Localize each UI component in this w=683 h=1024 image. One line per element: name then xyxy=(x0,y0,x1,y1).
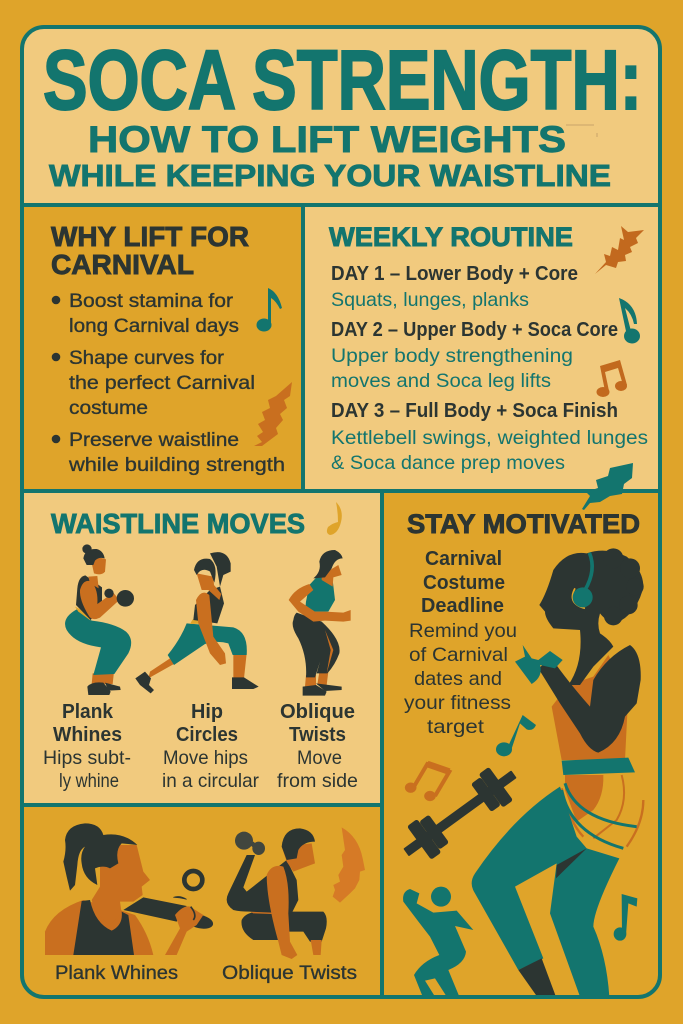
label: plank whines: Plank Whines xyxy=(55,962,178,984)
text: carnival costume deadline: Remind you xyxy=(409,620,517,642)
labels: hip circles: Hip xyxy=(191,701,223,723)
afro curls xyxy=(603,548,644,625)
heading: why lift: WHY LIFT FOR xyxy=(51,221,249,252)
illustration: dancing woman with headphones xyxy=(472,548,644,997)
icon: teal note xyxy=(496,715,536,756)
icon: teal note xyxy=(619,298,640,344)
figure: twist xyxy=(289,550,351,696)
labels: oblique twists: Twists xyxy=(289,724,346,746)
icon: teal feather overlapping border xyxy=(582,463,633,510)
text: carnival costume deadline: Carnival xyxy=(425,548,502,570)
day 2: DAY 2 – Upper Body + Soca Core xyxy=(331,319,618,341)
heading: weekly routine: WEEKLY ROUTINE xyxy=(329,222,573,252)
icon: orange leaf xyxy=(595,226,644,274)
text: carnival costume deadline: target xyxy=(427,716,485,738)
labels: hip circles: Circles xyxy=(176,724,238,746)
icon: orange feather xyxy=(333,827,365,903)
labels: plank whines: Hips subt- xyxy=(43,747,131,769)
panel: weekly routine xyxy=(303,205,659,491)
icon: orange double note xyxy=(405,764,449,801)
day 2 xyxy=(331,319,618,392)
labels: plank whines: Whines xyxy=(53,724,122,746)
panel: why lift for carnival xyxy=(22,205,303,491)
figure: lunge xyxy=(135,552,259,693)
labels: oblique twists xyxy=(277,701,358,792)
figure: squat with dumbbell xyxy=(65,544,134,695)
icon: orange double note xyxy=(596,360,627,397)
bullet list: while building strength xyxy=(68,454,285,476)
labels: hip circles: in a circular xyxy=(162,770,259,792)
bullet list: costume xyxy=(69,397,148,419)
labels: oblique twists: from side xyxy=(277,770,358,792)
day 3: Kettlebell swings, weighted lunges xyxy=(331,427,648,449)
day 1: Squats, lunges, planks xyxy=(331,289,529,311)
text: carnival costume deadline: Costume xyxy=(423,572,505,594)
icon: small teal squatting figure xyxy=(403,887,473,997)
labels: oblique twists: Oblique xyxy=(280,701,355,723)
panel: stay motivated xyxy=(382,491,659,997)
labels: plank whines: ly whine xyxy=(59,770,119,792)
subtitle line 2: WHILE KEEPING YOUR WAISTLINE xyxy=(49,158,611,193)
bullet list: Preserve waistline xyxy=(69,429,239,451)
panel: plank and oblique illustrations xyxy=(22,805,382,997)
labels: hip circles xyxy=(162,701,259,792)
icon: dumbbell xyxy=(394,757,526,869)
labels: oblique twists: Move xyxy=(297,747,342,769)
day 2: Upper body strengthening xyxy=(331,345,573,367)
text: carnival costume deadline: of Carnival xyxy=(409,644,508,666)
subtitle line 1: HOW TO LIFT WEIGHTS xyxy=(88,119,566,160)
icon: teal note lower right xyxy=(614,894,637,941)
bullet list: Shape curves for xyxy=(69,347,225,369)
day 3 xyxy=(331,400,648,474)
bullet list: the perfect Carnival xyxy=(69,372,255,394)
text: carnival costume deadline: dates and xyxy=(414,668,502,690)
illustration: plank whines woman xyxy=(45,823,214,955)
text: carnival costume deadline: Deadline xyxy=(421,595,504,617)
icon: teal music note xyxy=(256,288,282,332)
heading: carnival: CARNIVAL xyxy=(51,249,194,280)
labels: plank whines: Plank xyxy=(62,701,114,723)
icon: gold note xyxy=(327,502,342,535)
text: carnival costume deadline xyxy=(404,548,517,738)
day 3: DAY 3 – Full Body + Soca Finish xyxy=(331,400,618,422)
paper stain xyxy=(566,125,597,137)
bullet list xyxy=(52,290,285,476)
day 1: DAY 1 – Lower Body + Core xyxy=(331,263,578,285)
illustration: oblique twists woman xyxy=(227,828,327,959)
label: oblique twists: Oblique Twists xyxy=(222,962,357,984)
bullet list: Boost stamina for xyxy=(69,290,234,312)
bullet list: long Carnival days xyxy=(69,315,239,337)
text: carnival costume deadline: your fitness xyxy=(404,692,511,714)
icon: orange feather xyxy=(254,382,292,446)
day 3: & Soca dance prep moves xyxy=(331,452,565,474)
heading: waistline moves: WAISTLINE MOVES xyxy=(51,508,305,539)
day 2: moves and Soca leg lifts xyxy=(331,370,551,392)
labels: hip circles: Move hips xyxy=(163,747,248,769)
heading: stay motivated: STAY MOTIVATED xyxy=(407,509,640,539)
day 1 xyxy=(331,263,578,311)
panel: title xyxy=(22,27,660,205)
labels: plank whines xyxy=(43,701,131,792)
panel: waistline moves xyxy=(22,491,382,805)
